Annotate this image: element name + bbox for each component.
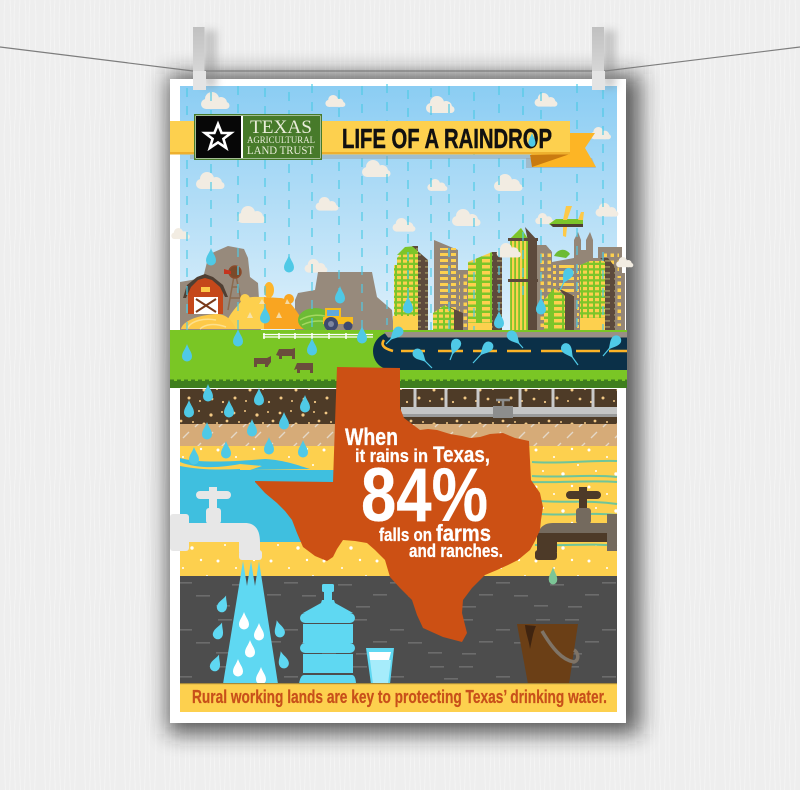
pipe bbox=[401, 389, 617, 418]
clouds bbox=[171, 92, 618, 273]
wind-blown drops on road bbox=[386, 266, 623, 368]
grass root band bbox=[170, 381, 627, 388]
tractor bbox=[323, 308, 353, 331]
barn bbox=[183, 274, 228, 314]
Texas map bbox=[255, 367, 543, 642]
water waves bbox=[180, 458, 335, 471]
bottom caption: Rural working lands are key to protecting Texas’ drinking water. bbox=[192, 687, 607, 707]
soil layer bbox=[180, 389, 617, 424]
title: LIFE OF A RAINDROP bbox=[342, 123, 552, 154]
road markings bbox=[383, 340, 627, 351]
hay hills bbox=[181, 282, 308, 329]
windmill bbox=[224, 266, 243, 310]
sky bbox=[180, 86, 617, 336]
Texas statistic text: farms bbox=[436, 520, 491, 546]
Texas statistic text: 84% bbox=[361, 453, 488, 538]
logo star bbox=[205, 124, 231, 148]
mountains bbox=[180, 246, 394, 332]
Texas statistic text: falls on bbox=[379, 525, 432, 545]
logo wordmark: LAND TRUST bbox=[247, 143, 315, 157]
Texas statistic text: When bbox=[345, 424, 398, 451]
poster shadow bbox=[168, 74, 640, 734]
Texas statistic text bbox=[345, 424, 503, 561]
rain streaks bbox=[187, 84, 603, 368]
tan layer bbox=[180, 424, 617, 446]
grass bbox=[170, 330, 627, 388]
road curb bbox=[384, 332, 627, 338]
raindrops bbox=[182, 248, 546, 464]
aquifer water bbox=[180, 470, 340, 542]
logo wordmark bbox=[247, 117, 315, 157]
drinking glass bbox=[366, 648, 394, 684]
right clothespin bbox=[592, 27, 616, 90]
road bbox=[373, 332, 627, 370]
Texas statistic text: it rains in bbox=[355, 446, 428, 466]
green dripping drop bbox=[549, 567, 557, 584]
fence bbox=[263, 333, 373, 339]
rusty bucket bbox=[517, 624, 578, 684]
city bbox=[393, 227, 625, 332]
water jug bbox=[299, 584, 356, 684]
left clothespin bbox=[193, 27, 217, 90]
plane bbox=[549, 206, 584, 237]
water stream bbox=[208, 561, 290, 684]
city clouds bbox=[497, 243, 633, 267]
logo bbox=[194, 114, 322, 160]
clothesline bbox=[0, 47, 800, 71]
brown faucet bbox=[535, 487, 617, 560]
title ribbon bbox=[170, 121, 596, 168]
title drop bbox=[528, 133, 536, 147]
logo wordmark: TEXAS bbox=[250, 117, 312, 138]
yellow sand layer bbox=[180, 446, 617, 576]
cows bbox=[254, 348, 313, 373]
Texas statistic text: Texas, bbox=[433, 442, 490, 467]
rock layer bbox=[180, 576, 617, 684]
logo wordmark: AGRICULTURAL bbox=[247, 136, 315, 146]
poster sheet bbox=[170, 79, 626, 723]
bottom strip bbox=[180, 683, 617, 712]
Texas statistic text: and ranches. bbox=[409, 541, 503, 561]
white faucet bbox=[170, 487, 262, 560]
field bbox=[298, 308, 332, 332]
green seep lines bbox=[532, 461, 617, 546]
